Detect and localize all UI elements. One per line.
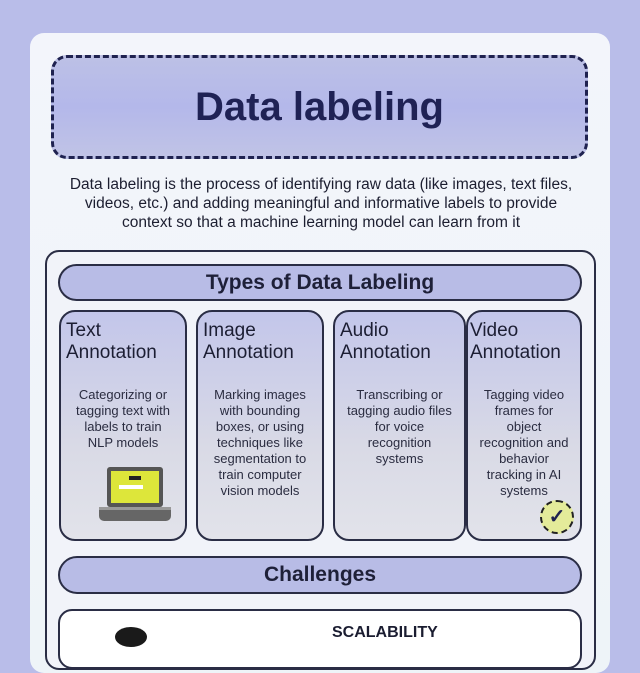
card: image annotation (196, 310, 324, 541)
card: image annotation: Marking images with bounding boxes, or using techniques like segmentation to train computer vision models (214, 387, 306, 498)
card: audio annotation: Transcribing or tagging audio files for voice recognition systems (347, 387, 452, 466)
icon: cloud (115, 627, 147, 647)
card: text annotation: Text (66, 320, 101, 341)
heading: challenges (58, 556, 582, 594)
card: text annotation: Annotation (66, 342, 157, 363)
card: video annotation: Tagging video frames for object recognition and behavior tracking in AI systems (480, 387, 568, 498)
heading: types (58, 264, 582, 301)
title box (51, 55, 588, 159)
icon: laptop (99, 467, 171, 521)
heading: challenges: Challenges (264, 563, 376, 586)
intro text: Data labeling is the process of identifying raw data (like images, text files, videos, etc.) and adding meaningful and informative labels to provide context so that a machine learning model can learn from it (70, 176, 572, 231)
card: video annotation: Video (470, 320, 518, 341)
card: text annotation: Categorizing or tagging text with labels to train NLP models (76, 387, 170, 450)
card: text annotation (59, 310, 187, 541)
card: video annotation (466, 310, 582, 541)
title: Data labeling (195, 84, 444, 128)
card: audio annotation: Annotation (340, 342, 431, 363)
card: audio annotation (333, 310, 466, 541)
challenge title: SCALABILITY (332, 624, 438, 641)
card: image annotation: Image (203, 320, 256, 341)
card: audio annotation: Audio (340, 320, 389, 341)
challenge card: scalability (58, 609, 582, 669)
card: video annotation: Annotation (470, 342, 561, 363)
heading: types: Types of Data Labeling (206, 271, 434, 294)
icon: check badge: ✓ (549, 506, 565, 528)
outer panel (45, 250, 596, 670)
card: image annotation: Annotation (203, 342, 294, 363)
icon: check badge (540, 500, 574, 534)
